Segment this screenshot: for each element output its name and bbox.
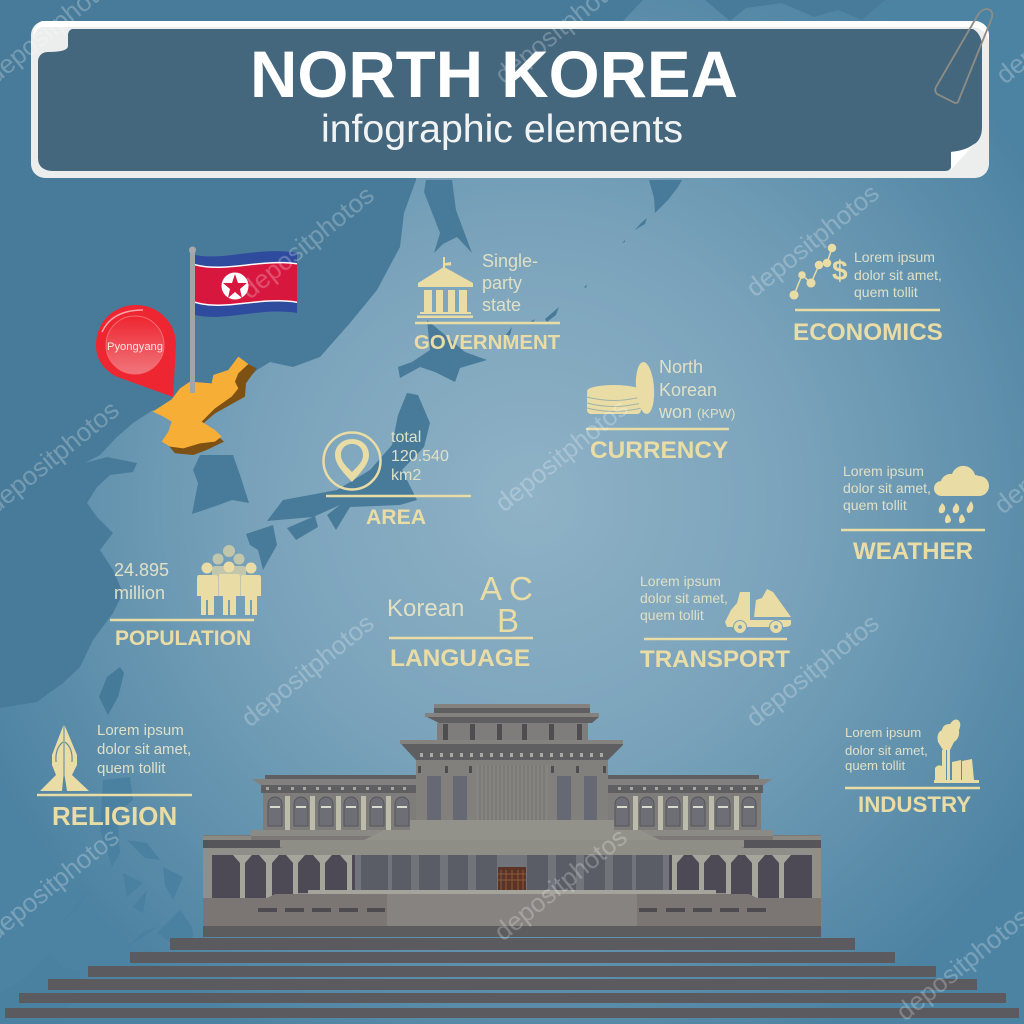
- header banner: [31, 9, 992, 178]
- population block: POPULATION: [115, 627, 251, 650]
- icon: government building: [417, 257, 473, 318]
- land: northeast coast above header: [705, 0, 885, 21]
- icon: A B C letters: [480, 570, 533, 639]
- currency block: [586, 357, 735, 464]
- title: NORTH KOREA: [250, 37, 738, 111]
- land: Sakhalin: [424, 180, 472, 253]
- icon: A B C letters: C: [509, 570, 533, 607]
- land: Korean peninsula south: [192, 455, 249, 514]
- North Korea map shape: [153, 357, 257, 455]
- government block: [414, 251, 561, 354]
- industry block: INDUSTRY: [858, 792, 971, 817]
- icon: coin stack: [587, 361, 656, 415]
- weather block: WEATHER: [853, 538, 973, 565]
- transport block: TRANSPORT: [640, 646, 790, 673]
- language block: Korean: [387, 595, 464, 622]
- industry block: dolor sit amet,: [845, 743, 928, 758]
- currency block: CURRENCY: [590, 437, 728, 464]
- icon: A B C letters: A: [480, 570, 502, 607]
- flag pole: [189, 246, 196, 393]
- top roof: [425, 704, 599, 723]
- Pyongyang map pin: [96, 305, 176, 397]
- population block: million: [114, 583, 165, 603]
- staircase: [5, 938, 1019, 1018]
- transport block: Lorem ipsum: [640, 573, 721, 589]
- middle roof: [400, 740, 623, 760]
- weather block: Lorem ipsum: [843, 463, 924, 479]
- industry block: [845, 720, 980, 817]
- land: Honshu: [267, 393, 430, 530]
- land: Shikoku: [287, 516, 318, 540]
- economics block: ECONOMICS: [793, 319, 943, 346]
- weather block: [841, 463, 989, 565]
- transport block: [640, 573, 791, 673]
- religion block: RELIGION: [52, 803, 177, 831]
- transport block: dolor sit amet,: [640, 590, 728, 606]
- government block: Single-: [482, 251, 538, 271]
- language block: [387, 570, 533, 672]
- subtitle: infographic elements: [321, 108, 683, 151]
- economics block: Lorem ipsum: [854, 249, 935, 265]
- ledge and base: [308, 890, 716, 894]
- Pyongyang map pin: Pyongyang: [107, 341, 163, 353]
- transport block: quem tollit: [640, 607, 704, 623]
- land: Philippines: [57, 777, 193, 947]
- land: Kyushu: [246, 525, 277, 570]
- religion block: dolor sit amet,: [97, 741, 191, 758]
- North Korean flag: [195, 251, 297, 317]
- land: Kamchatka tail: [622, 180, 682, 243]
- land: Borneo edge: [0, 952, 82, 1024]
- icon: A B C letters: B: [497, 602, 519, 639]
- icon: group of people: [197, 545, 261, 615]
- population block: [110, 545, 261, 650]
- entrance door: [498, 867, 526, 890]
- land: Taiwan: [99, 667, 124, 715]
- government block: GOVERNMENT: [414, 332, 561, 354]
- palace lower block: [203, 835, 821, 937]
- government block: party: [482, 273, 522, 293]
- icon: dump truck: [725, 589, 791, 633]
- watermarks: depositphotos: [740, 607, 885, 733]
- area block: [324, 429, 471, 529]
- government block: state: [482, 295, 521, 315]
- right wing: [604, 775, 821, 898]
- weather block: dolor sit amet,: [843, 480, 931, 496]
- watermarks: depositphotos: [488, 821, 633, 947]
- paperclip: [935, 9, 992, 103]
- watermarks: depositphotos: [740, 177, 885, 303]
- area block: 120.540: [391, 448, 449, 465]
- religion block: quem tollit: [97, 760, 166, 777]
- watermarks: depositphotos: [235, 179, 380, 305]
- currency block: North: [659, 357, 703, 377]
- industry block: Lorem ipsum: [845, 725, 921, 740]
- Kumsusan palace building: [203, 704, 821, 937]
- left wing: [203, 775, 420, 898]
- upper storey: [437, 723, 588, 741]
- economics block: $: [832, 255, 848, 286]
- area block: km2: [391, 467, 421, 484]
- icon: location pin in circle: [324, 432, 380, 490]
- currency block: won (KPW): [658, 402, 735, 422]
- land: northern Asia above header: [0, 0, 643, 40]
- icon: praying hands: [40, 725, 89, 791]
- weather block: quem tollit: [843, 497, 907, 513]
- area block: total: [391, 429, 421, 446]
- economics block: quem tollit: [854, 284, 918, 300]
- currency block: Korean: [659, 380, 717, 400]
- land: Kuril islands: [505, 285, 587, 336]
- religion block: [37, 722, 192, 831]
- icon: factory with smoke: [934, 720, 979, 783]
- overhang: [280, 840, 744, 855]
- language block: LANGUAGE: [390, 645, 530, 672]
- religion block: Lorem ipsum: [97, 722, 184, 739]
- land: Asian mainland: [0, 0, 416, 708]
- central hall: [410, 758, 614, 830]
- watermarks: depositphotos: [235, 607, 380, 733]
- land: Hokkaido: [398, 320, 487, 382]
- colonnade centre: [355, 848, 669, 892]
- economics block: [790, 244, 943, 346]
- industry block: quem tollit: [845, 758, 905, 773]
- area block: AREA: [366, 506, 426, 529]
- population block: 24.895: [114, 560, 169, 580]
- icon: rain cloud: [934, 466, 989, 523]
- economics block: dolor sit amet,: [854, 267, 942, 283]
- watermarks: depositphotos: [489, 392, 634, 518]
- icon: growth chart and dollar sign: [790, 244, 836, 299]
